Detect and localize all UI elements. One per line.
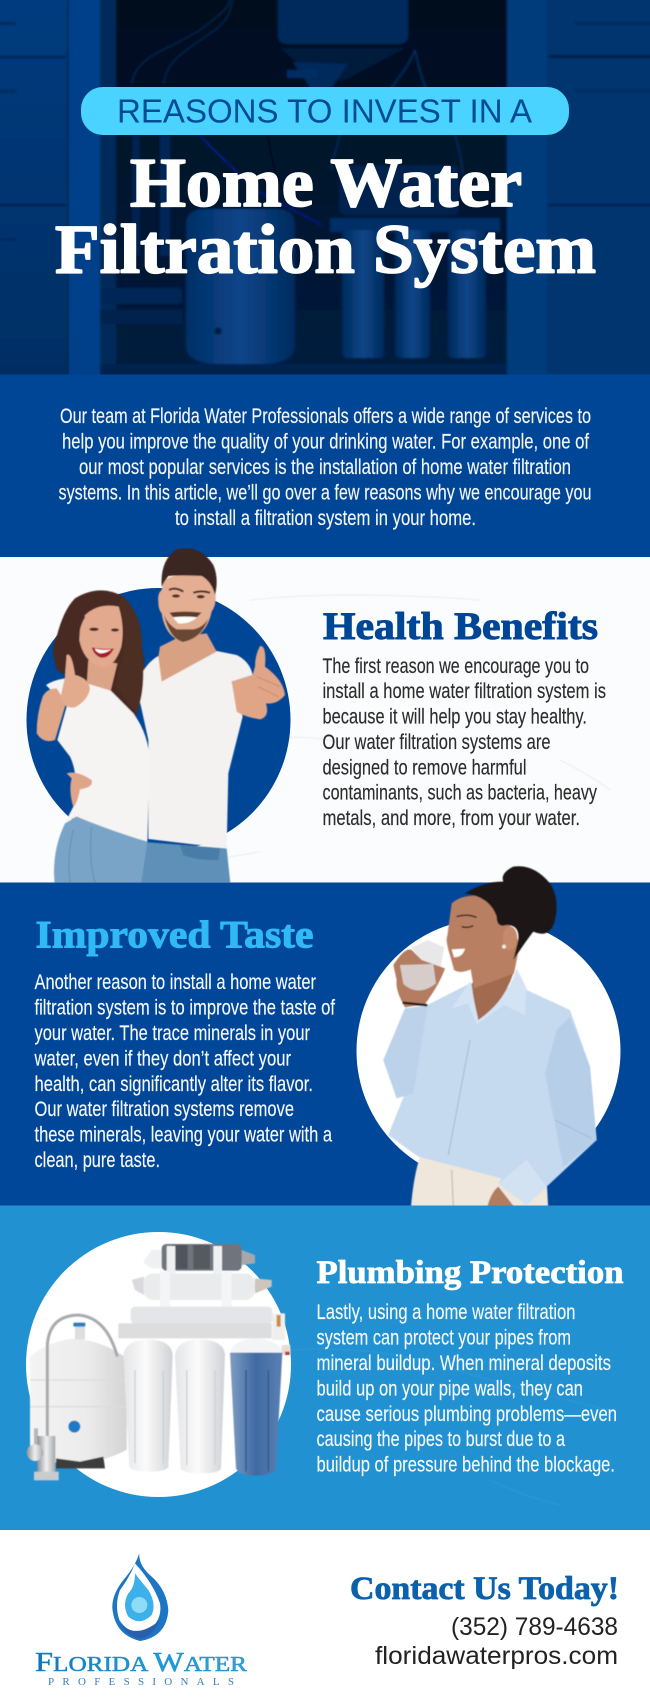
health benefits body text: Our water filtration systems are xyxy=(322,731,550,754)
improved taste body text: Our water filtration systems remove xyxy=(34,1098,294,1121)
health benefits body text: metals, and more, from your water. xyxy=(322,807,580,830)
improved taste body text xyxy=(34,971,335,1172)
heading: health benefits: Health Benefits xyxy=(323,605,598,648)
icon: Florida Water Professionals logo drop xyxy=(112,1553,168,1641)
improved taste body text: filtration system is to improve the taste of xyxy=(34,996,335,1020)
improved taste body text: water, even if they don’t affect your xyxy=(34,1048,291,1070)
logo wordmark: FLORIDA WATER xyxy=(35,1647,247,1677)
plumbing protection body text: causing the pipes to burst due to a xyxy=(316,1428,565,1451)
logo wordmark xyxy=(35,1647,247,1688)
intro text block: to install a filtration system in your home. xyxy=(175,507,476,530)
panel: footer xyxy=(0,1530,650,1702)
subtitle pill xyxy=(81,87,569,135)
heading: plumbing protection: Plumbing Protection xyxy=(316,1255,624,1291)
improved taste body text: health, can significantly alter its flavor. xyxy=(34,1073,313,1096)
health benefits body text: designed to remove harmful xyxy=(322,756,526,780)
panel: health benefits xyxy=(0,548,650,887)
circle behind filter xyxy=(26,1232,291,1497)
panel: plumbing protection xyxy=(0,1206,650,1530)
photo: woman drinking water xyxy=(383,866,597,1210)
title xyxy=(55,145,596,288)
plumbing protection body text xyxy=(316,1301,617,1476)
heading: improved taste: Improved Taste xyxy=(36,914,314,956)
logo wordmark: PROFESSIONALS xyxy=(48,1676,234,1688)
circle behind couple xyxy=(26,588,290,852)
improved taste body text: your water. The trace minerals in your xyxy=(34,1022,310,1045)
contact details: floridawaterpros.com xyxy=(375,1642,618,1670)
plumbing protection body text: system can protect your pipes from xyxy=(316,1326,571,1350)
contact heading: Contact Us Today! xyxy=(350,1571,619,1607)
title: Filtration System xyxy=(55,212,596,288)
intro text block xyxy=(58,405,592,530)
panel: introduction xyxy=(0,374,650,558)
photo: reverse osmosis filtration unit xyxy=(27,1244,290,1480)
plumbing protection body text: build up on your pipe walls, they can xyxy=(316,1378,583,1400)
contact details: (352) 789-4638 xyxy=(451,1613,618,1641)
improved taste body text: Another reason to install a home water xyxy=(34,971,316,994)
panel: hero background photo of under-sink filtration system xyxy=(0,0,650,387)
subtitle pill: REASONS TO INVEST IN A xyxy=(117,92,532,130)
improved taste body text: clean, pure taste. xyxy=(34,1149,160,1172)
title: Home Water xyxy=(130,145,522,222)
contact details xyxy=(375,1613,618,1670)
plumbing protection body text: Lastly, using a home water filtration xyxy=(316,1301,576,1324)
photo: couple with thumbs up xyxy=(37,548,285,887)
circle behind woman xyxy=(356,919,620,1183)
improved taste body text: these minerals, leaving your water with a xyxy=(34,1124,332,1146)
panel: improved taste xyxy=(0,866,650,1210)
health benefits body text xyxy=(322,655,606,830)
